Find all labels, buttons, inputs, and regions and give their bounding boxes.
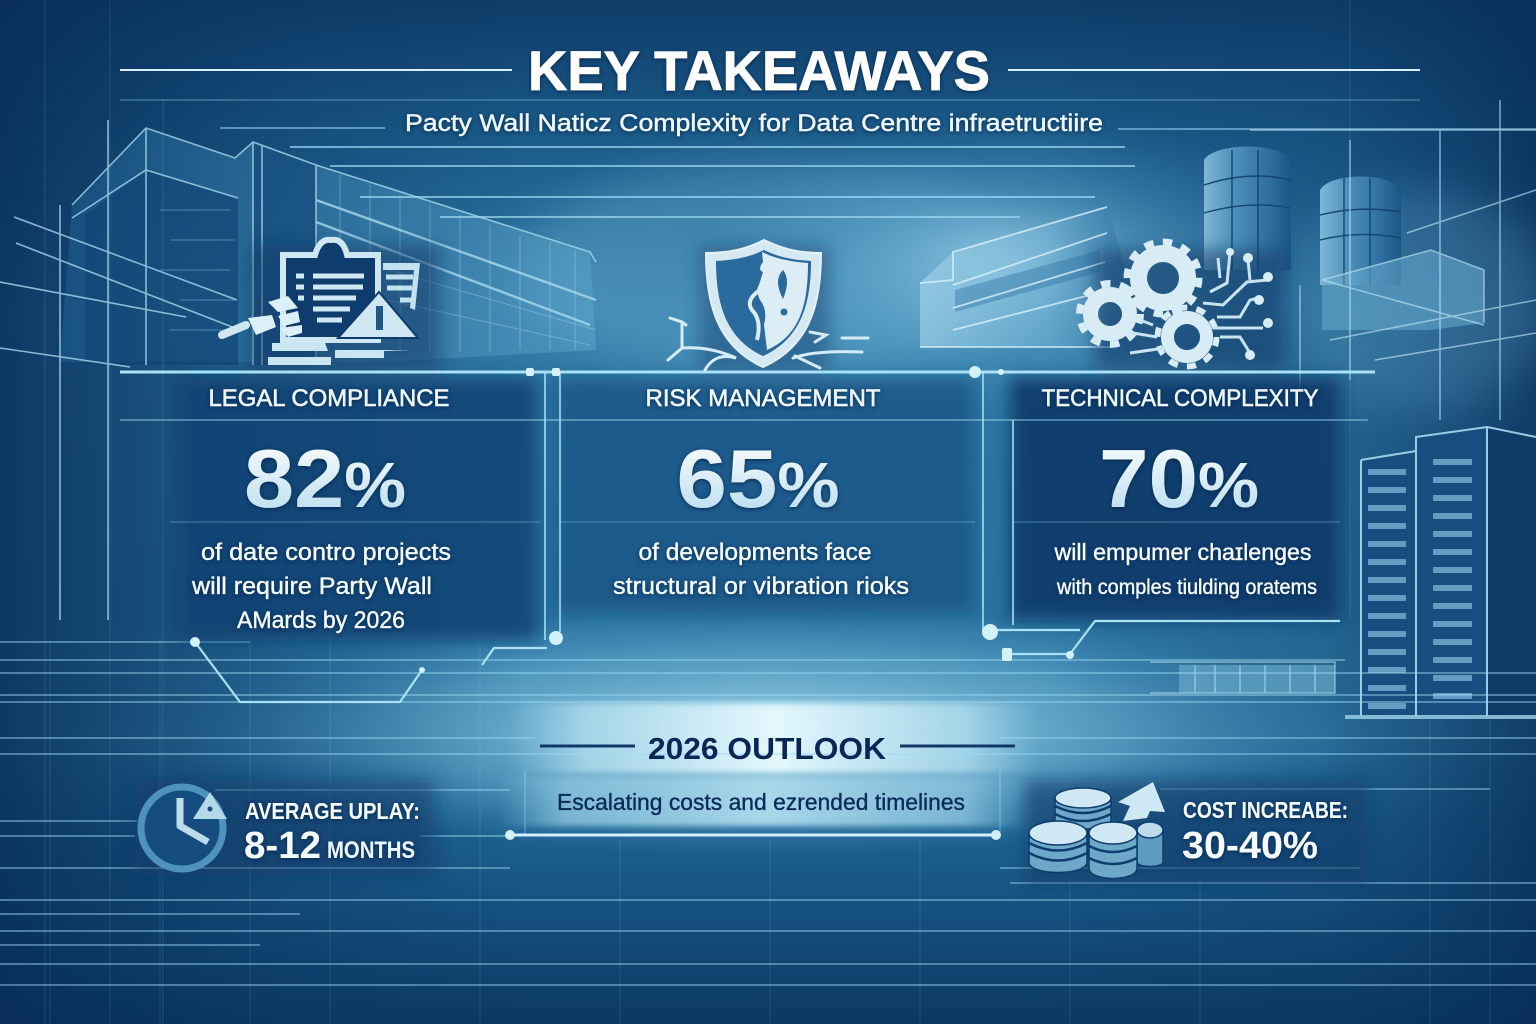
panel: technical complexity xyxy=(1042,242,1318,599)
stat: cost increase xyxy=(1029,782,1348,878)
label: cost increase: COST INCREABE: xyxy=(1183,797,1348,823)
subtitle: Pacty Wall Naticz Complexity for Data Centre infraetructiire xyxy=(405,110,1103,137)
icon: coin stacks with arrow xyxy=(1029,782,1165,878)
icon: cracked shield xyxy=(668,240,868,370)
background: tower bottom right xyxy=(1150,427,1536,717)
description: risk management: structural or vibration rioks xyxy=(613,573,909,600)
heading: technical complexity: TECHNICAL COMPLEXITY xyxy=(1042,385,1318,412)
stat: average delay xyxy=(141,787,420,869)
title: KEY TAKEAWAYS xyxy=(528,39,990,102)
description: legal compliance: AMards by 2026 xyxy=(237,607,405,634)
description: technical complexity: will empumer chaɪlenges xyxy=(1053,539,1312,565)
title rules xyxy=(120,69,1420,71)
background: data centre building left xyxy=(0,120,596,620)
panel: 2026 outlook xyxy=(540,731,1015,815)
background: low building xyxy=(1179,665,1335,693)
description: risk management xyxy=(613,539,909,600)
value: 8-12 months: 8-12 xyxy=(244,825,321,867)
stat: 65%: 65% xyxy=(676,432,840,525)
bright outlook bands xyxy=(500,703,1040,826)
stat: 70%: 70% xyxy=(1099,432,1259,525)
heading: risk management: RISK MANAGEMENT xyxy=(646,385,881,412)
heading: legal compliance: LEGAL COMPLIANCE xyxy=(208,385,450,412)
panel: risk management xyxy=(613,240,909,600)
description: legal compliance xyxy=(191,539,451,634)
description: outlook: Escalating costs and ezrended timelines xyxy=(557,789,965,815)
icon: gears and circuit traces xyxy=(1080,242,1273,366)
description: risk management: of developments face xyxy=(638,539,872,566)
label: average delay: AVERAGE UPLAY: xyxy=(245,798,420,824)
stat: 82%: 82% xyxy=(244,432,406,525)
heading: 2026 outlook: 2026 OUTLOOK xyxy=(648,731,887,766)
unit: months: MONTHS xyxy=(327,837,415,864)
icon: clock with warning xyxy=(141,787,227,869)
panel: legal compliance xyxy=(191,240,451,634)
dark backing panels xyxy=(135,245,1370,885)
description: legal compliance: of date contro projects xyxy=(201,539,451,566)
circuit connector lines xyxy=(120,366,1375,840)
description: technical complexity: with comples tiulding oratems xyxy=(1056,576,1317,599)
value: 30-40%: 30-40% xyxy=(1182,825,1318,867)
description: technical complexity xyxy=(1053,539,1317,599)
background: data centre buildings right xyxy=(920,100,1536,420)
icon: clipboard, gavel and warning xyxy=(222,240,420,365)
description: legal compliance: will require Party Wall xyxy=(191,573,432,600)
background: storage cylinders xyxy=(1204,146,1401,285)
